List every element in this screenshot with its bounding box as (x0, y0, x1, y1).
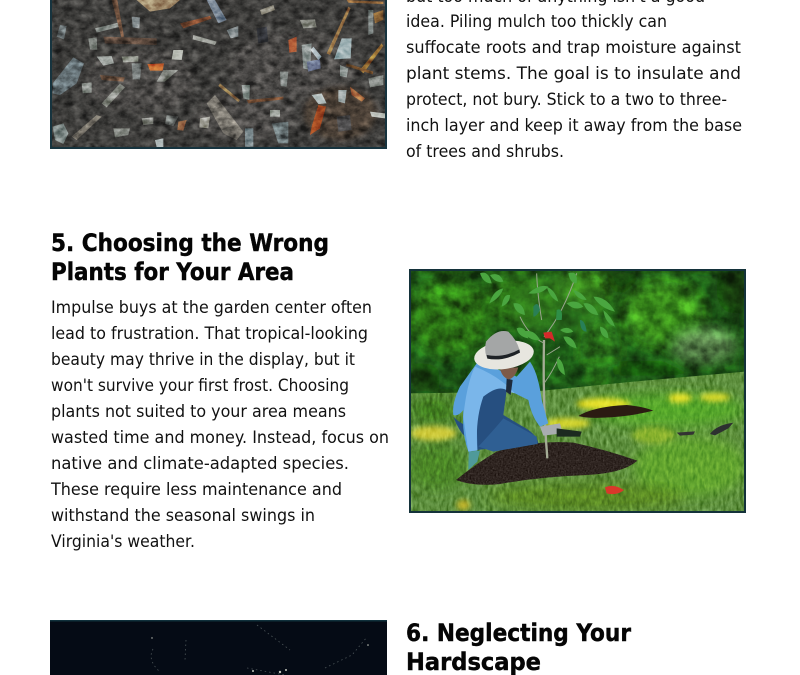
paragraph: mulch depth text: plant stems. The goal is to insulate and (406, 64, 741, 84)
paragraph: choosing plants text: withstand the seasonal swings in (51, 506, 315, 526)
paragraph: choosing plants text: Impulse buys at the garden center often (51, 298, 372, 318)
heading: 6. Neglecting Your Hardscape (406, 619, 631, 675)
tree trunk and leaves (544, 340, 547, 458)
heading: 5. Choosing the Wrong Plants (51, 229, 329, 286)
paragraph: mulch depth text: protect, not bury. Stick to a two to three- (406, 90, 727, 110)
tree canopy glow (510, 277, 603, 337)
gardener (453, 331, 582, 470)
hedge background (407, 267, 750, 393)
photo: gardener planting a young tree (407, 267, 750, 513)
red ribbon (543, 332, 555, 342)
sunlit patches (410, 393, 730, 510)
heading: 6. Neglecting Your Hardscape: 6. Neglecting Your (406, 619, 631, 647)
photo: wood mulch chips (50, 0, 387, 149)
paragraph: mulch depth text: suffocate roots and trap moisture against (406, 38, 741, 58)
paragraph: choosing plants text: lead to frustration. That tropical-looking (51, 324, 368, 344)
distant mulch and tools (578, 405, 653, 418)
paragraph: mulch depth text (406, 0, 742, 162)
paragraph: choosing plants text: These require less maintenance and (50, 480, 342, 500)
photo: dark nighttime hardscape with faint lights (50, 620, 387, 675)
paragraph: choosing plants text: won't survive your first frost. Choosing (51, 376, 349, 396)
paragraph: choosing plants text: Virginia's weather. (51, 532, 195, 552)
grey chips (53, 0, 385, 147)
lawn (410, 372, 745, 512)
hat (474, 340, 534, 370)
mulch mound (456, 442, 637, 485)
brown and orange splinters (100, 0, 383, 135)
paragraph: choosing plants text: plants not suited to your area means (51, 402, 346, 422)
paragraph: mulch depth text: inch layer and keep it away from the base (406, 116, 742, 136)
paragraph: mulch depth text: idea. Piling mulch too thickly can (406, 12, 667, 32)
paragraph: choosing plants text: beauty may thrive in the display, but it (51, 350, 355, 370)
heading: 5. Choosing the Wrong Plants: 5. Choosing the Wrong (51, 229, 329, 257)
heading: 5. Choosing the Wrong Plants: Plants for Your Area (51, 258, 294, 286)
paragraph: choosing plants text (50, 298, 389, 552)
paragraph: mulch depth text: of trees and shrubs. (406, 142, 564, 162)
paragraph: choosing plants text: wasted time and money. Instead, focus on (51, 428, 389, 448)
paragraph: choosing plants text: native and climate-adapted species. (51, 454, 349, 474)
